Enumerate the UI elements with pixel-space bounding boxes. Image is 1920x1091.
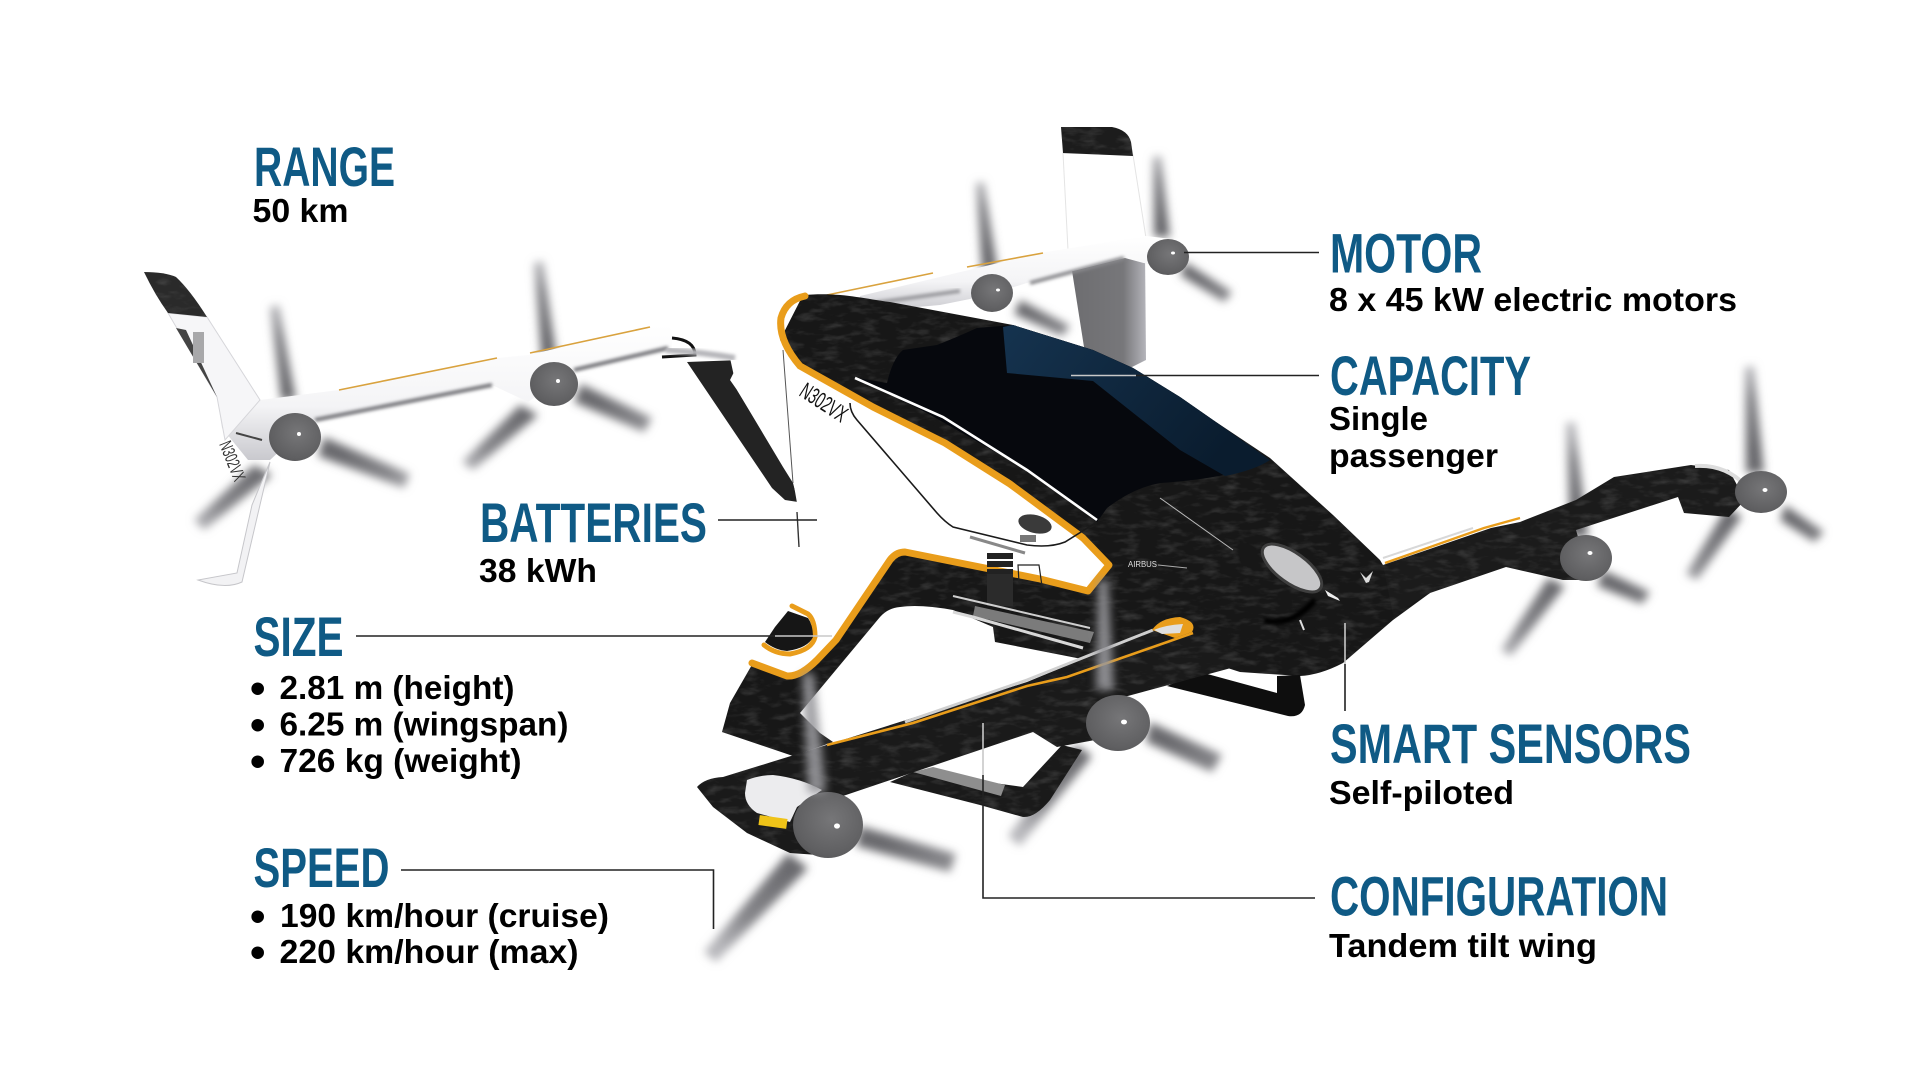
fuselage dark shell	[722, 294, 1430, 756]
black leg patch	[765, 611, 813, 651]
speed callout: •	[250, 928, 265, 977]
front left wing	[697, 617, 1242, 855]
configuration callout	[1329, 864, 1668, 964]
size callout: SIZE	[254, 605, 344, 668]
window stripe and door seam	[783, 350, 1097, 547]
capacity callout	[1329, 344, 1531, 474]
rear right tail fin	[1061, 127, 1146, 368]
orange trim	[752, 296, 1109, 676]
motor callout: MOTOR	[1330, 222, 1482, 284]
batteries callout	[479, 491, 707, 589]
capacity callout: passenger	[1329, 437, 1498, 474]
front motors	[793, 471, 1787, 858]
configuration callout: CONFIGURATION	[1330, 864, 1668, 928]
smart sensors callout: SMART SENSORS	[1330, 712, 1691, 775]
smart sensors callout	[1329, 712, 1691, 811]
size callout: •	[250, 737, 265, 786]
speed callout: 190 km/hour (cruise)	[280, 897, 609, 934]
size callout: 6.25 m (wingspan)	[280, 706, 568, 742]
strut pylon	[661, 293, 798, 502]
leader lines	[356, 252, 1345, 929]
range callout	[252, 135, 395, 229]
rear motors	[269, 239, 1189, 461]
smart sensors callout: Self-piloted	[1329, 774, 1514, 811]
speed callout: 220 km/hour (max)	[280, 933, 578, 970]
canopy glass	[857, 325, 1270, 522]
batteries callout: BATTERIES	[480, 491, 707, 554]
front right wing	[1383, 465, 1745, 615]
nose details: AIRBUS	[1128, 560, 1157, 569]
landing skid	[890, 672, 1305, 817]
size callout: 726 kg (weight)	[280, 742, 522, 779]
motor callout	[1329, 222, 1737, 318]
capacity callout: Single	[1329, 400, 1428, 437]
aircraft illustration	[144, 127, 1824, 962]
capacity callout: CAPACITY	[1330, 344, 1531, 407]
rear left wing and tail	[144, 272, 672, 586]
white fuselage side	[750, 340, 1112, 678]
speed callout	[250, 836, 609, 977]
size callout: •	[250, 664, 265, 713]
vents and lower silver trim	[953, 537, 1094, 648]
rear right wing	[827, 236, 1180, 312]
registration mark: N302VX	[795, 379, 852, 428]
range callout: RANGE	[254, 135, 395, 198]
motor callout: 8 x 45 kW electric motors	[1329, 281, 1737, 318]
rear left wing and tail: N302VX	[215, 438, 249, 484]
range callout: 50 km	[252, 192, 348, 229]
nose details	[1128, 498, 1373, 630]
size callout	[250, 605, 568, 786]
size callout: •	[250, 700, 265, 750]
batteries callout: 38 kWh	[479, 552, 597, 589]
door handle	[1016, 511, 1054, 542]
speed callout: SPEED	[254, 836, 390, 899]
configuration callout: Tandem tilt wing	[1329, 927, 1597, 964]
propeller blades behind aircraft	[194, 156, 1824, 962]
propeller blades in front of aircraft	[802, 580, 1114, 793]
speed callout: •	[250, 892, 265, 941]
size callout: 2.81 m (height)	[280, 669, 514, 706]
